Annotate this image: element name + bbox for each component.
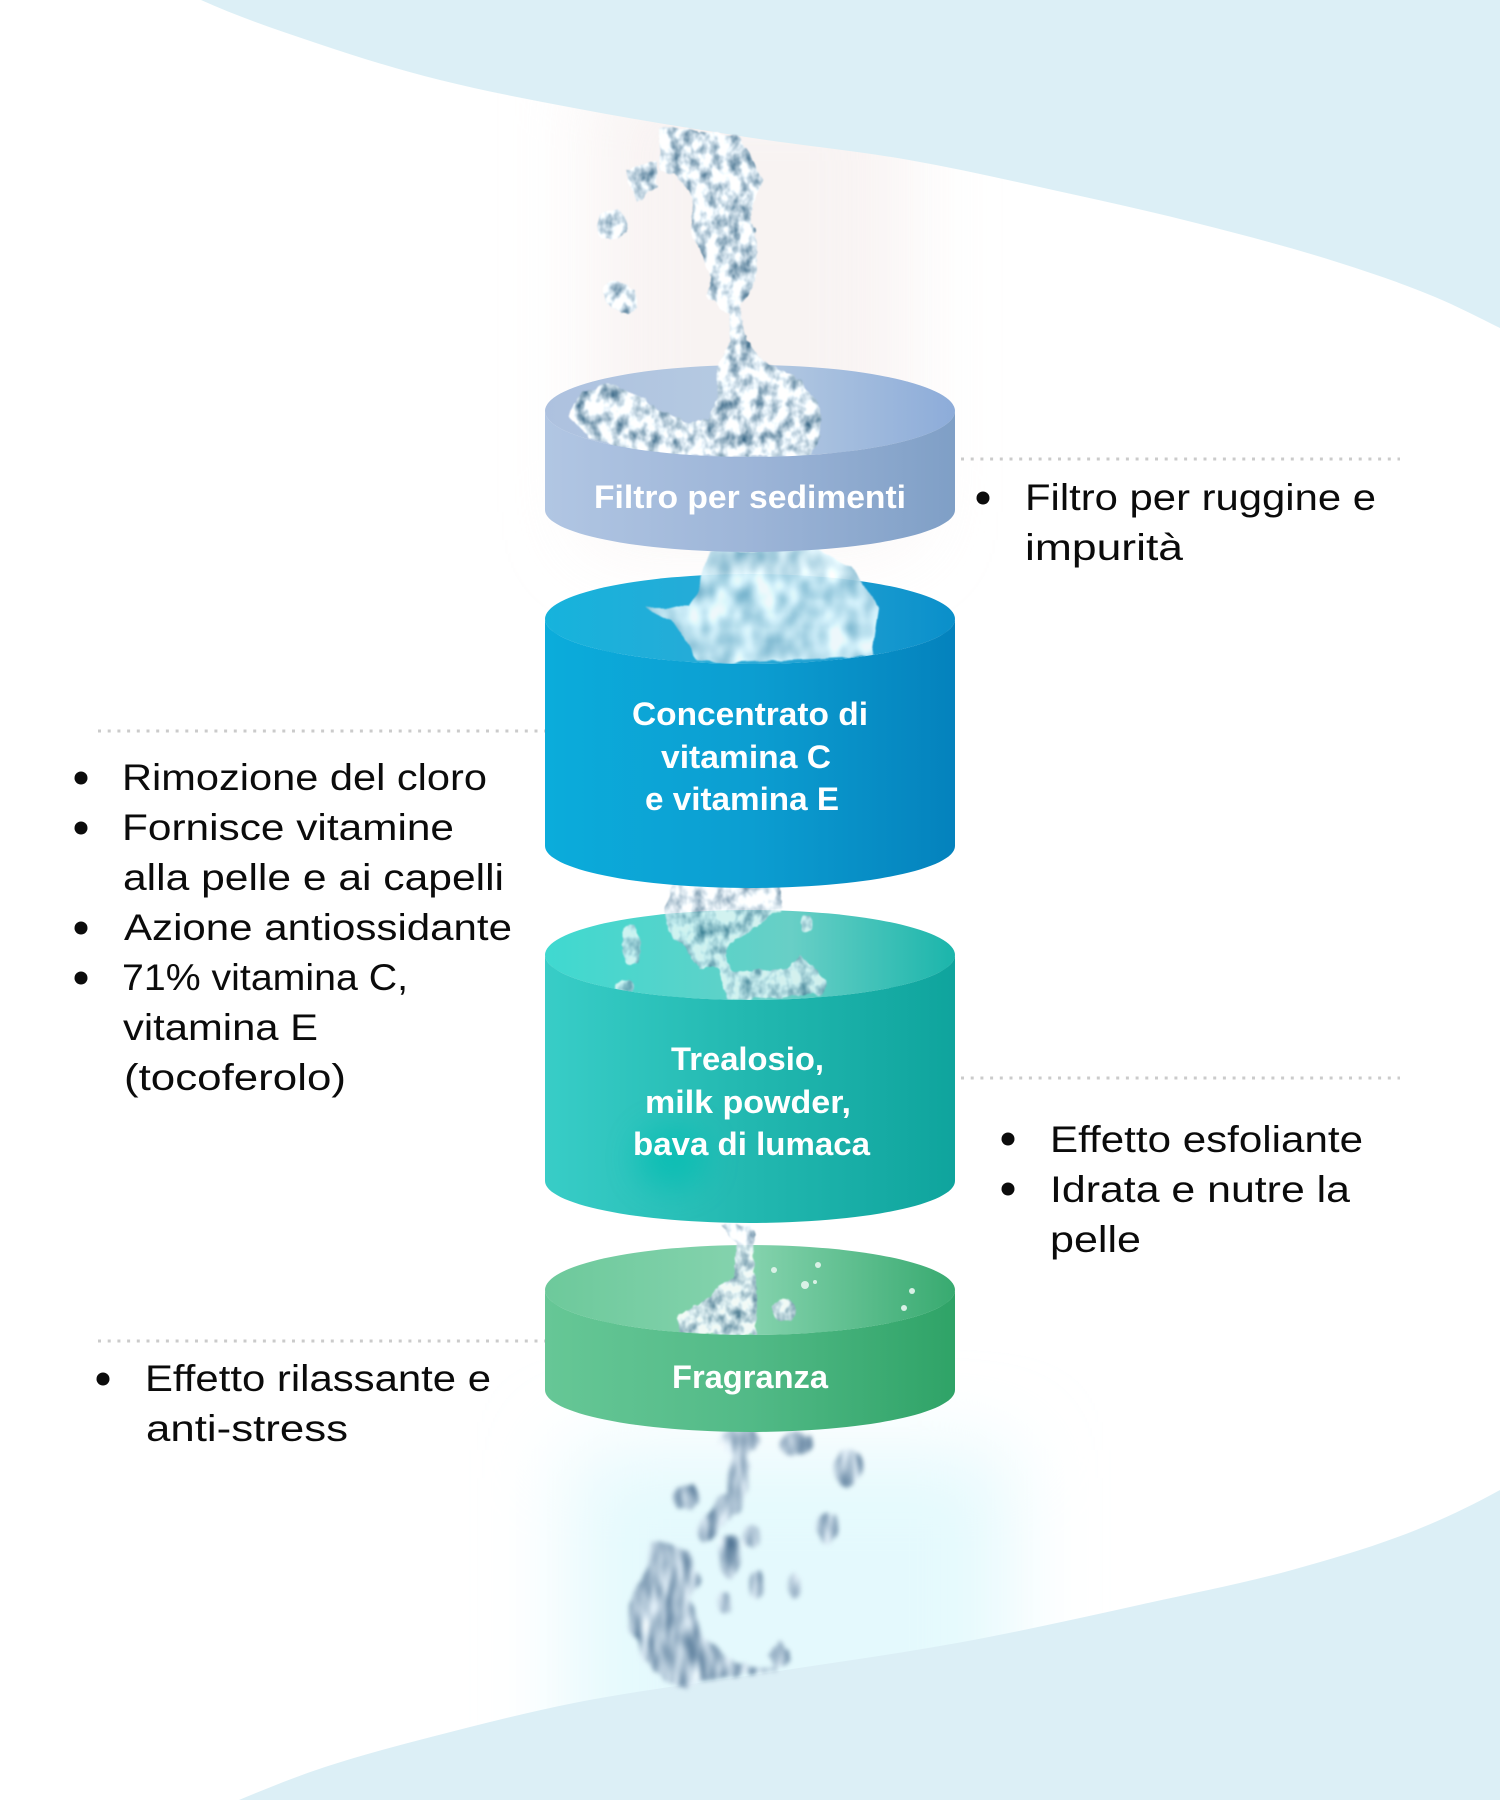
dotted leader [961,458,1400,460]
disc top [545,910,955,1000]
label: Trealosio, [671,1041,824,1077]
label: Fragranza [672,1359,828,1395]
disc body [545,955,955,1223]
falling water stream [570,127,820,457]
text block: trehalose layer benefits: Effetto esfoliante [1050,1118,1363,1160]
text block: vitamin concentrate benefits: 71% vitamina C, [122,956,408,998]
dotted leader [98,1340,545,1342]
text block: vitamin concentrate benefits: Azione antiossidante [124,906,512,948]
soft highlight on body [638,1128,706,1188]
label: e vitamina E [645,781,839,817]
disc top [545,574,955,664]
water droplets below the last layer [628,1428,862,1688]
label [633,1041,870,1162]
text block: vitamin concentrate benefits [74,756,512,1098]
label: Concentrato di [632,696,868,732]
disc body [545,1290,955,1432]
layer: Filtro per sedimenti [545,127,1400,552]
disc body [545,411,955,552]
text block: Filtro per sedimenti benefits: impurità [1025,526,1183,568]
text block: trehalose layer benefits: Idrata e nutre la [1050,1168,1350,1210]
text block: vitamin concentrate benefits: vitamina E [123,1006,318,1048]
text block: Filtro per sedimenti benefits [976,476,1376,568]
layer: Fragranza [98,1225,955,1432]
text block: fragrance benefits [96,1357,491,1449]
layer: Trealosio, milk powder, bava di lumaca [545,885,1400,1223]
text block: vitamin concentrate benefits: Fornisce vitamine [122,806,454,848]
dotted leader [961,1076,1400,1080]
background wave: top [201,0,1500,328]
label: vitamina C [661,739,831,775]
label [632,696,868,817]
text block: trehalose layer benefits: pelle [1050,1218,1141,1260]
text block: Filtro per sedimenti benefits: Filtro per ruggine e [1025,476,1376,518]
label: milk powder, [645,1084,851,1120]
disc top [545,1245,955,1335]
layer: Concentrato di vitamina C e vitamina E [98,550,955,888]
background wave: bottom [239,1490,1500,1800]
text block: vitamin concentrate benefits: (tocoferolo) [124,1056,346,1098]
disc top [545,365,955,457]
label: Filtro per sedimenti [594,479,906,515]
small bubbles on disc [771,1262,915,1311]
text block: fragrance benefits: Effetto rilassante e [145,1357,491,1399]
warm glow behind upper water stream [590,60,910,540]
text block: trehalose layer benefits [1002,1118,1363,1260]
dotted leader [98,730,545,732]
cool glow behind lower water stream [570,1450,1010,1800]
water splash on disc [678,1225,795,1335]
label: bava di lumaca [633,1126,870,1162]
disc body [545,619,955,888]
water splash on disc [616,885,827,1000]
text block: vitamin concentrate benefits: Rimozione del cloro [122,756,487,798]
text block: vitamin concentrate benefits: alla pelle e ai capelli [123,856,504,898]
water splash on disc [643,550,880,663]
text block: fragrance benefits: anti-stress [146,1407,348,1449]
